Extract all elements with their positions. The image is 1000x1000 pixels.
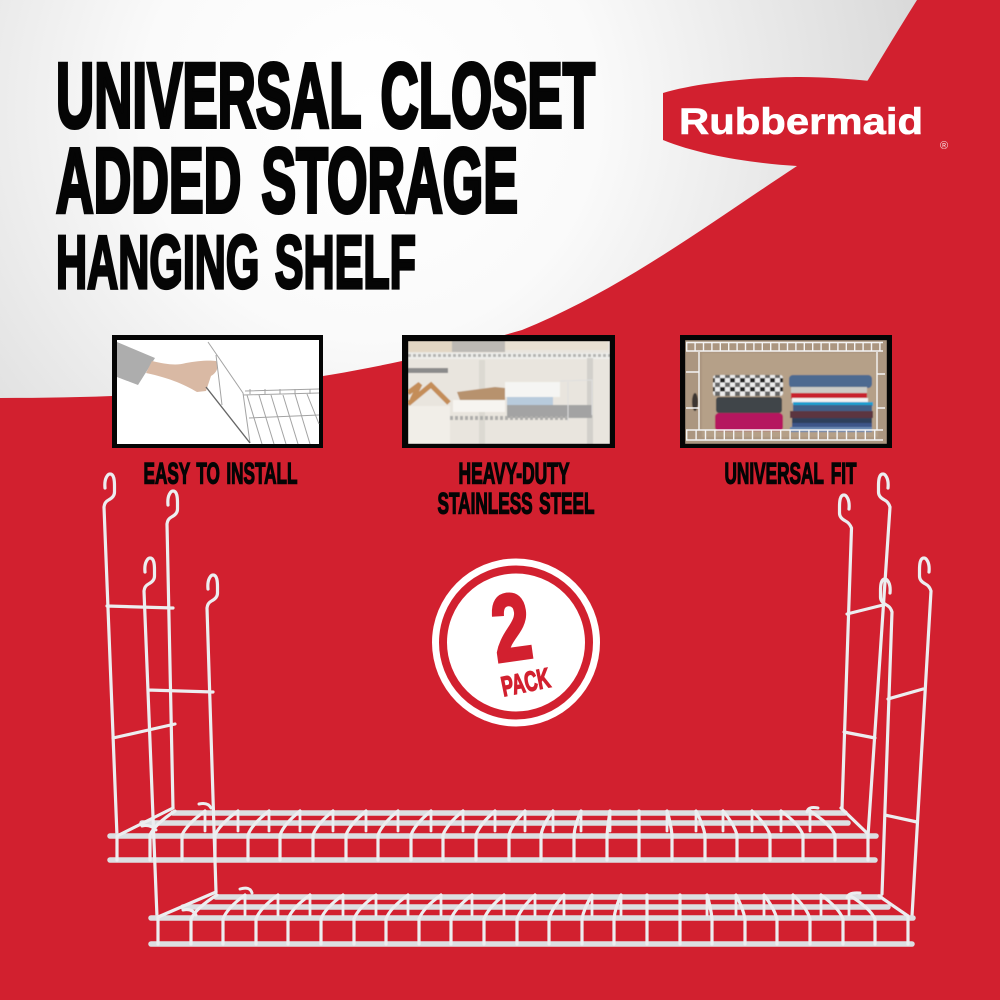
wire shelf [206,342,319,444]
white-grey curved header panel [0,0,917,398]
label: heavy-duty stainless steel: STAINLESS STEEL [438,488,594,520]
left stack of towels [713,375,783,396]
hangers [408,384,449,404]
badge: 2 pack: 2 [485,573,537,682]
label: easy to install: EASY TO INSTALL [144,458,298,490]
wire shelf: top (rear) [104,474,890,860]
title: HANGING SHELF [56,220,416,304]
wire shelf [686,342,885,440]
door handle [692,393,698,411]
left uprights [104,474,178,836]
photo panel: universal fit [680,335,892,448]
hand [146,361,218,392]
folded clothes [457,387,505,404]
right uprights [880,558,931,916]
badge: 2 pack [432,558,600,726]
left uprights [144,558,218,917]
rear short wires [245,895,849,915]
photo panel: easy to install [112,335,323,448]
title [56,45,595,304]
title: UNIVERSAL CLOSET [56,45,595,147]
wire shelf: bottom (front) [144,558,931,944]
label: heavy-duty stainless steel: HEAVY-DUTY [458,458,570,490]
title: ADDED STORAGE [56,130,518,232]
badge: 2 pack: PACK [499,662,553,702]
label: heavy-duty stainless steel [438,458,594,520]
Rubbermaid logo: ® [940,140,948,152]
photo panel: heavy-duty closet shelf [402,335,615,448]
cross wires [158,892,908,944]
sleeve [117,342,155,385]
cross wires [117,808,868,860]
horizontal bars [151,897,913,944]
horizontal bars [110,813,876,860]
Rubbermaid logo: Rubbermaid [679,101,923,142]
label: universal fit: UNIVERSAL FIT [724,458,856,490]
right uprights [840,474,890,836]
corner hooks [142,804,818,830]
rear short wires [205,811,810,831]
right stack of shirts [789,375,872,388]
corner hooks [183,888,860,915]
Rubbermaid logo [663,77,948,166]
